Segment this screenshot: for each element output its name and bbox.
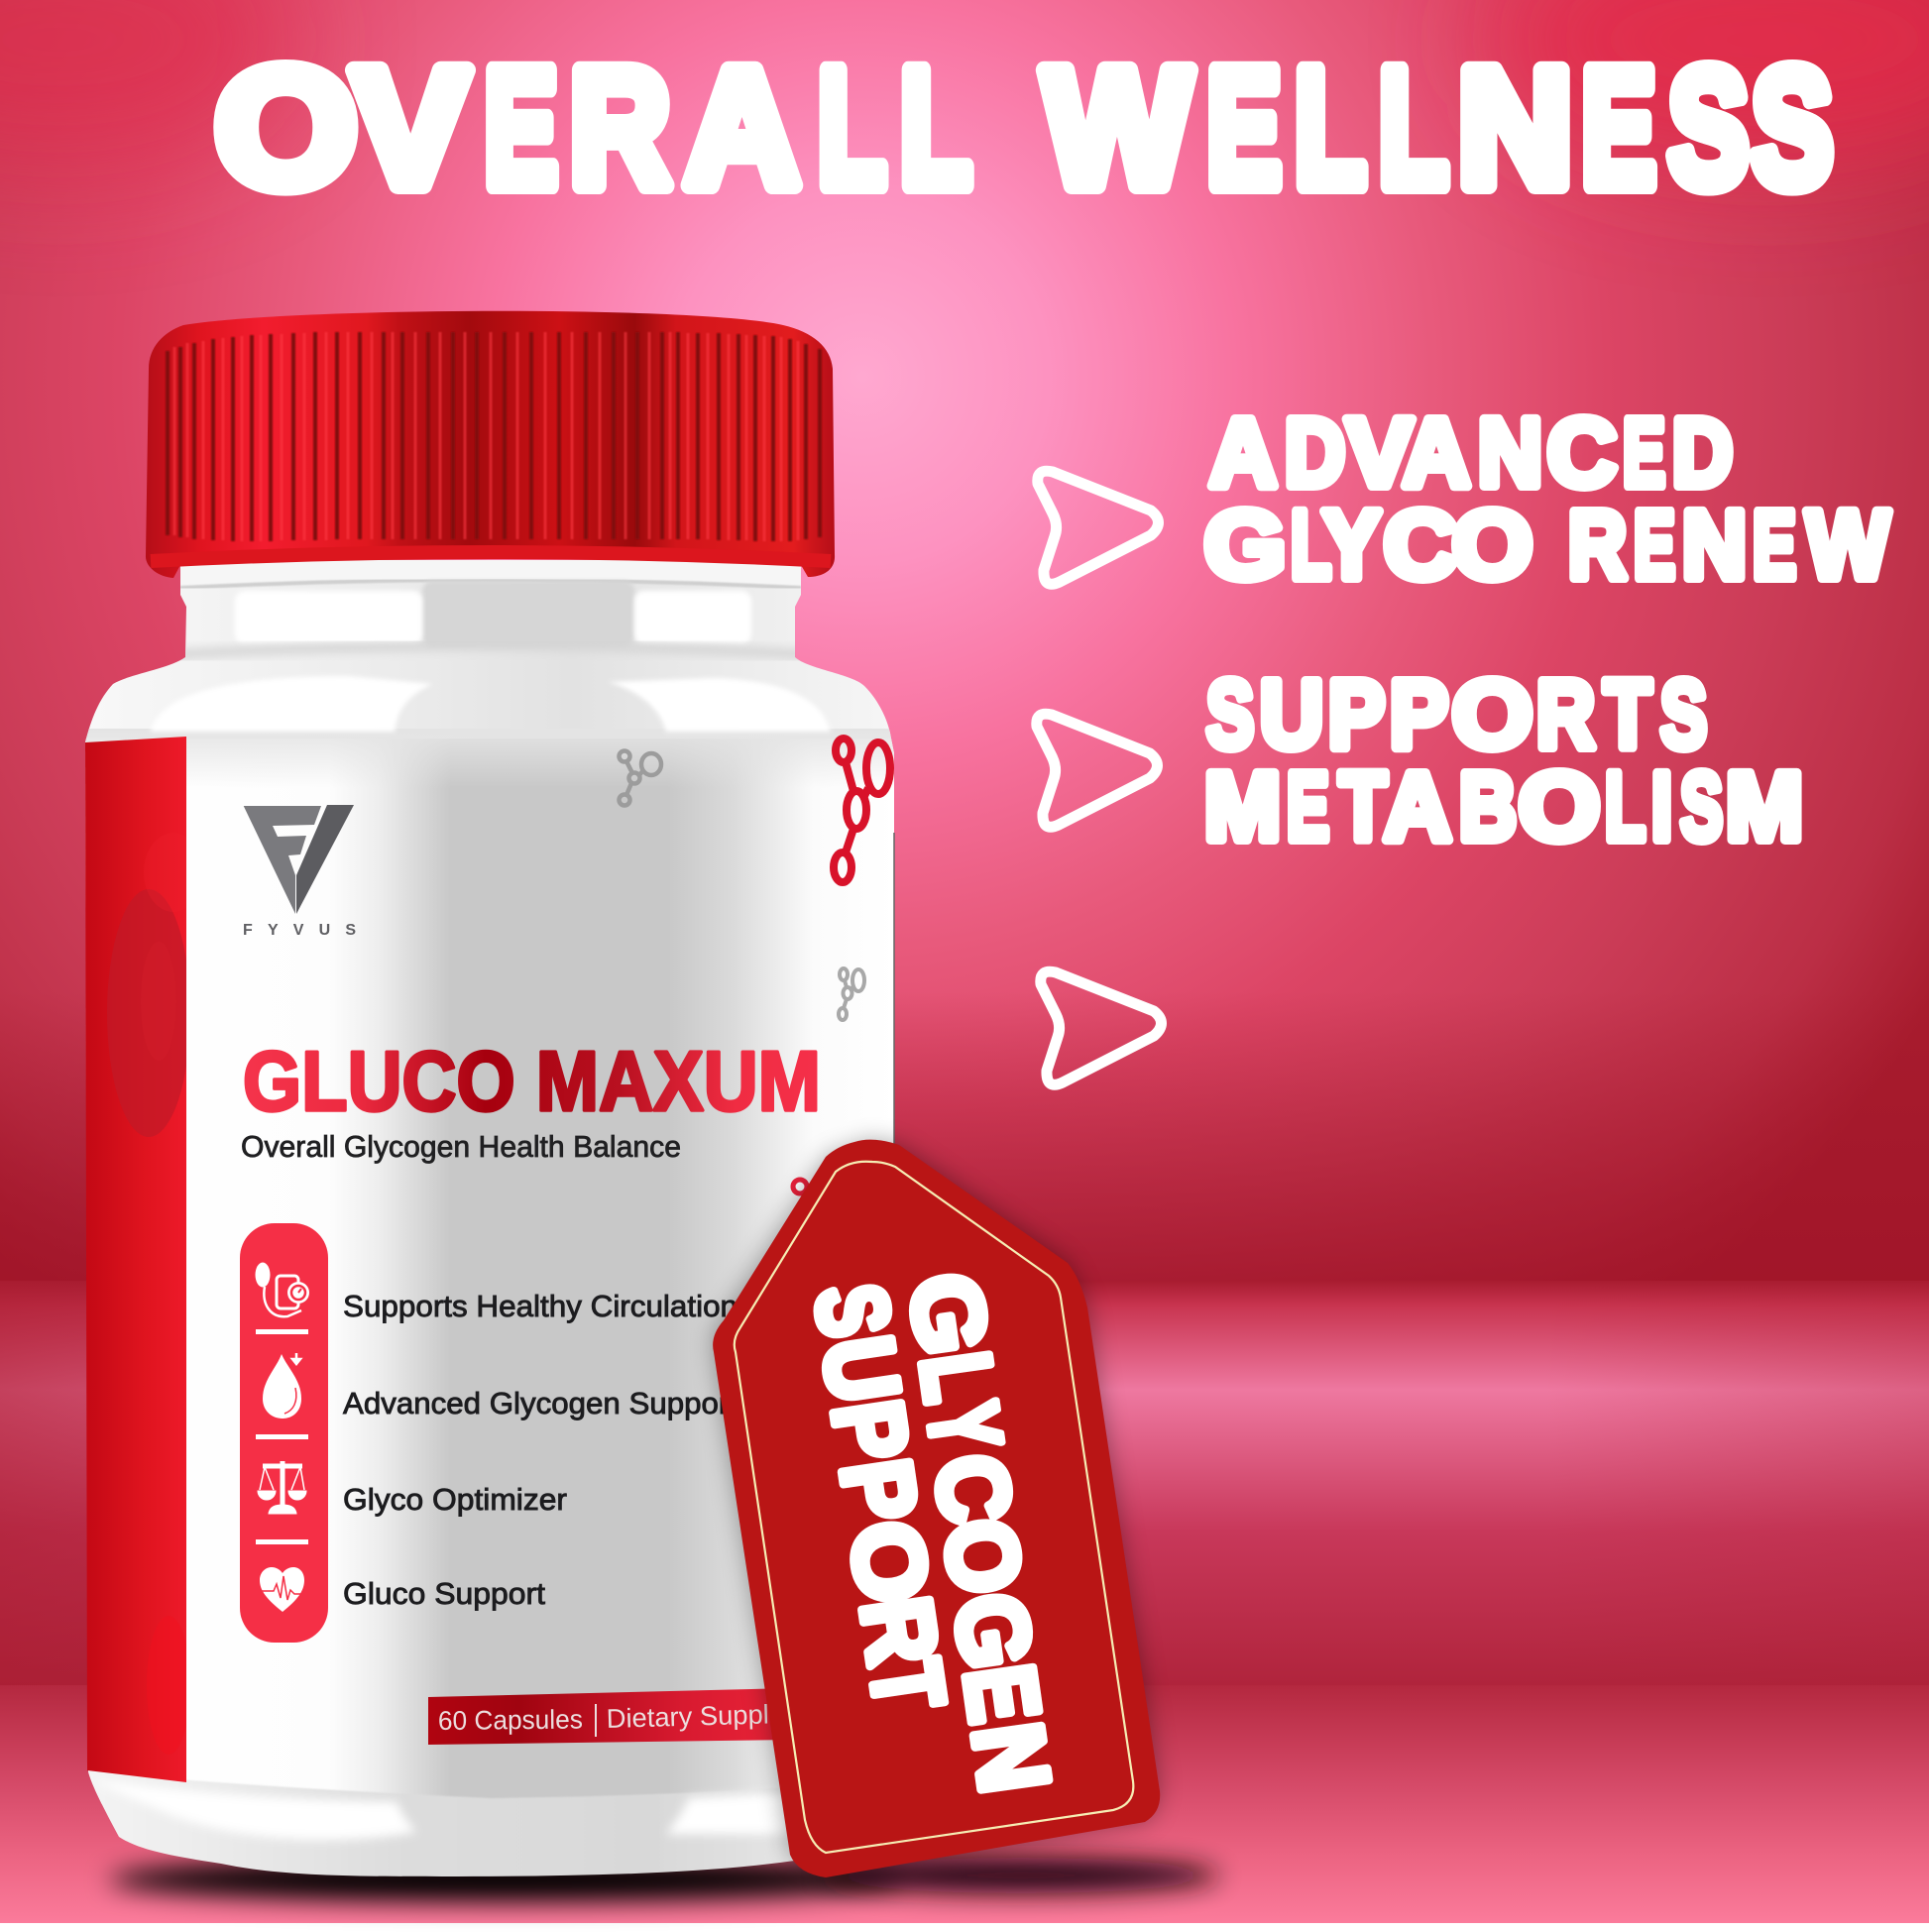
tag stitched outline	[735, 1162, 1133, 1853]
text: Advanced Glyco Renew: V	[1346, 398, 1413, 507]
subtitle: Overall Glycogen Health Balance	[241, 1129, 681, 1164]
tag text: P	[820, 1453, 938, 1528]
tag text: N	[951, 1717, 1071, 1799]
tag text: R	[840, 1591, 959, 1671]
benefit list text	[343, 1289, 738, 1611]
text: Advanced Glyco Renew: R	[1568, 491, 1627, 599]
icon: outline arrow 2	[1037, 714, 1158, 827]
icon: red molecule	[834, 739, 890, 882]
benefit list text: Advanced Glycogen Support	[343, 1386, 738, 1421]
title: OVERALL WELLNESS: E	[1207, 34, 1281, 221]
icon: drop	[263, 1353, 301, 1419]
text: Advanced Glyco Renew: E	[1753, 491, 1796, 599]
title: OVERALL WELLNESS: A	[685, 34, 799, 221]
tag text: G	[888, 1267, 1009, 1361]
icon: grey molecule side	[839, 968, 864, 1020]
text: Supports Metabolism: M	[1204, 752, 1281, 860]
capsule count bar	[428, 1688, 846, 1745]
benefit icon pill	[240, 1223, 328, 1643]
icon: heart with pulse	[260, 1567, 304, 1612]
tag text: P	[811, 1394, 929, 1467]
text: Supports Metabolism: P	[1328, 660, 1385, 768]
bottle	[79, 311, 902, 1888]
text: Advanced Glyco Renew: N	[1478, 398, 1542, 507]
title: OVERALL WELLNESS: E	[485, 34, 558, 221]
text: Advanced Glyco Renew: A	[1403, 398, 1470, 507]
title: OVERALL WELLNESS: S	[1668, 34, 1749, 221]
text: Supports Metabolism: R	[1536, 660, 1595, 768]
tag text: O	[829, 1515, 950, 1610]
text: Supports Metabolism: O	[1452, 660, 1532, 768]
text: Supports Metabolism: T	[1339, 752, 1387, 860]
text: Advanced Glyco Renew: C	[1547, 398, 1617, 507]
text: Supports Metabolism: A	[1384, 752, 1451, 860]
text: Advanced Glyco Renew: G	[1204, 491, 1286, 599]
title: OVERALL WELLNESS: L	[900, 34, 969, 221]
text: Supports Metabolism: O	[1519, 752, 1600, 860]
icon: outline arrow 1	[1038, 471, 1158, 584]
tag shape	[713, 1140, 1160, 1877]
icon: red molecule partly hidden	[793, 1180, 807, 1193]
text: Supports Metabolism: S	[1206, 660, 1254, 768]
text: Advanced Glyco Renew: D	[1672, 398, 1733, 507]
cap	[146, 311, 835, 578]
text: Supports Metabolism: L	[1605, 752, 1645, 860]
title: OVERALL WELLNESS: W	[1044, 34, 1191, 221]
text: Advanced Glyco Renew: W	[1806, 491, 1889, 599]
title: OVERALL WELLNESS: O	[216, 34, 357, 221]
text: Advanced Glyco Renew	[1204, 398, 1889, 599]
tag text	[794, 1267, 1071, 1799]
text: Supports Metabolism: S	[1660, 660, 1707, 768]
benefit 2: arrow and Supports Metabolism	[1037, 660, 1803, 860]
tag text: S	[794, 1278, 911, 1344]
divider	[256, 1329, 308, 1334]
icon: balance scale	[258, 1461, 306, 1514]
text: Supports Metabolism: S	[1680, 752, 1723, 860]
tag text: G	[933, 1587, 1053, 1675]
bottle edge line	[893, 833, 895, 1150]
text: Advanced Glyco Renew: E	[1634, 491, 1675, 599]
benefit 1: arrow and Advanced Glyco Renew	[1038, 398, 1889, 599]
text: Advanced Glyco Renew: O	[1452, 491, 1532, 599]
benefit list text: Gluco Support	[343, 1576, 545, 1611]
tag text: E	[943, 1658, 1061, 1729]
logo: FYVUS	[243, 805, 356, 939]
divider	[256, 1434, 308, 1439]
icon: grey molecule top	[619, 751, 661, 805]
text: Supports Metabolism: M	[1726, 752, 1803, 860]
divider	[256, 1539, 308, 1544]
text: Advanced Glyco Renew: A	[1209, 398, 1277, 507]
bottle body silhouette and highlights	[79, 555, 902, 1888]
text: Supports Metabolism: P	[1390, 660, 1448, 768]
title: OVERALL WELLNESS: L	[1379, 34, 1448, 221]
title: OVERALL WELLNESS: L	[818, 34, 886, 221]
ground shadow under bottle and tag	[109, 1858, 1219, 1901]
tag text: T	[849, 1653, 965, 1717]
title: OVERALL WELLNESS: L	[1295, 34, 1366, 221]
title: OVERALL WELLNESS: E	[1582, 34, 1655, 221]
title: OVERALL WELLNESS: V	[353, 34, 468, 221]
capsule count bar: 60 Capsules	[438, 1704, 583, 1736]
benefit list text: Supports Healthy Circulation	[343, 1289, 738, 1323]
text: Advanced Glyco Renew: Y	[1322, 491, 1381, 599]
text: Advanced Glyco Renew: C	[1384, 491, 1457, 599]
tag text: Y	[906, 1396, 1022, 1456]
title: OVERALL WELLNESS: S	[1752, 34, 1833, 221]
brand name: GLUCO MAXUM: GLUCO MAXUM	[243, 1035, 821, 1129]
tag text: L	[899, 1346, 1015, 1409]
title: OVERALL WELLNESS: N	[1458, 34, 1572, 221]
logo mark	[244, 805, 354, 914]
text: Advanced Glyco Renew: E	[1623, 398, 1665, 507]
capsule count bar: Dietary Supplement	[606, 1697, 846, 1734]
tag: Glycogen Support	[713, 1140, 1160, 1877]
red side strip	[85, 737, 186, 1782]
text: Supports Metabolism: T	[1604, 660, 1651, 768]
text: Advanced Glyco Renew: D	[1285, 398, 1345, 507]
text: Supports Metabolism: I	[1651, 752, 1672, 860]
text: Supports Metabolism: B	[1459, 752, 1517, 860]
text: Supports Metabolism	[1204, 660, 1803, 860]
tag text: C	[913, 1448, 1033, 1531]
tag shadow	[714, 1140, 1160, 1877]
title: OVERALL WELLNESS: R	[570, 34, 670, 221]
icon: blood pressure monitor	[256, 1263, 309, 1316]
text: Supports Metabolism: E	[1287, 752, 1329, 860]
tag text: U	[802, 1330, 921, 1409]
text: Supports Metabolism: U	[1260, 660, 1323, 768]
text: Advanced Glyco Renew: N	[1682, 491, 1747, 599]
benefit list text: Glyco Optimizer	[343, 1482, 567, 1517]
text: Advanced Glyco Renew: L	[1291, 491, 1331, 599]
icon: outline arrow 3	[1041, 971, 1162, 1084]
logo wordmark: FYVUS	[243, 922, 356, 939]
tag text: O	[922, 1513, 1043, 1600]
